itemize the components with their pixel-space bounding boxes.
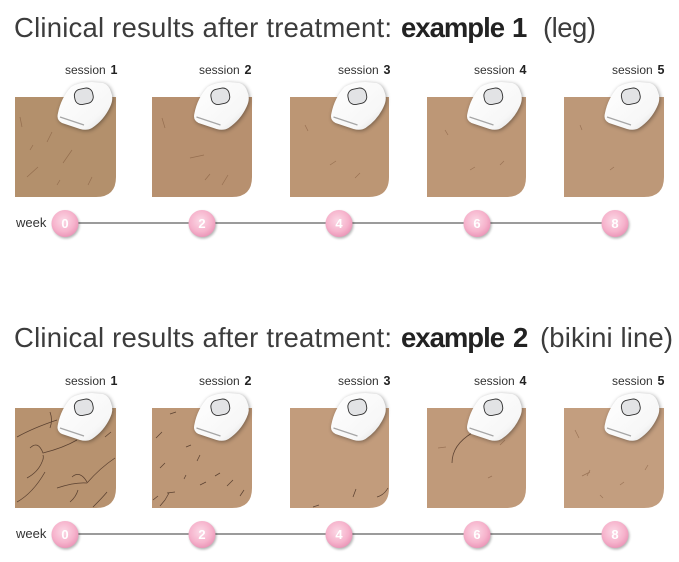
session 2: session 2	[199, 374, 252, 388]
week 0	[52, 210, 80, 238]
week 2	[188, 210, 216, 238]
session 2	[152, 63, 252, 197]
session 2	[152, 374, 252, 508]
session 3: session 3	[338, 374, 391, 388]
week 0	[52, 521, 80, 550]
session 3	[290, 63, 391, 197]
week 2: 2	[198, 216, 206, 231]
panel: example 2 sessions	[15, 374, 665, 508]
week 2	[188, 521, 216, 550]
week 4: 4	[335, 216, 343, 231]
session 4	[427, 374, 527, 508]
session 5	[564, 63, 665, 197]
panel: example 1 sessions	[15, 63, 665, 197]
week 2: 2	[198, 527, 206, 542]
session 1: session 1	[65, 374, 118, 388]
session 3	[290, 374, 391, 508]
session 4	[427, 63, 527, 197]
week 6: 6	[473, 216, 481, 231]
title: example 2: example	[401, 322, 505, 353]
week 6: 6	[473, 527, 481, 542]
session 1	[15, 374, 118, 508]
session 5: session 5	[612, 63, 665, 77]
title: example 1: example	[401, 12, 505, 43]
week 8	[602, 210, 630, 238]
week 4	[326, 210, 354, 238]
timeline: example 2: week	[15, 526, 47, 541]
week 6	[464, 521, 492, 550]
session 2: session 2	[199, 63, 252, 77]
session 3: session 3	[338, 63, 391, 77]
title: example 2: Clinical results after treatment:	[14, 322, 392, 353]
week 4: 4	[335, 527, 343, 542]
session 5: session 5	[612, 374, 665, 388]
session 4: session 4	[474, 63, 527, 77]
timeline: example 1	[15, 210, 630, 238]
week 8: 8	[611, 216, 619, 231]
timeline: example 2	[15, 521, 630, 550]
session 1: session 1	[65, 63, 118, 77]
week 6	[464, 210, 492, 238]
title: example 1: (leg)	[543, 12, 596, 43]
week 0: 0	[61, 527, 69, 542]
title: example 2: 2	[513, 322, 528, 353]
week 4	[326, 521, 354, 550]
session 4: session 4	[474, 374, 527, 388]
title: example 1: Clinical results after treatment:	[14, 12, 392, 43]
title: example 1: 1	[512, 12, 527, 43]
session 1	[15, 63, 118, 197]
week 8	[602, 521, 630, 550]
week 0: 0	[61, 216, 69, 231]
session 5	[564, 374, 665, 508]
week 8: 8	[611, 527, 619, 542]
title: example 2: (bikini line)	[540, 322, 673, 353]
timeline: example 1: week	[15, 215, 47, 230]
